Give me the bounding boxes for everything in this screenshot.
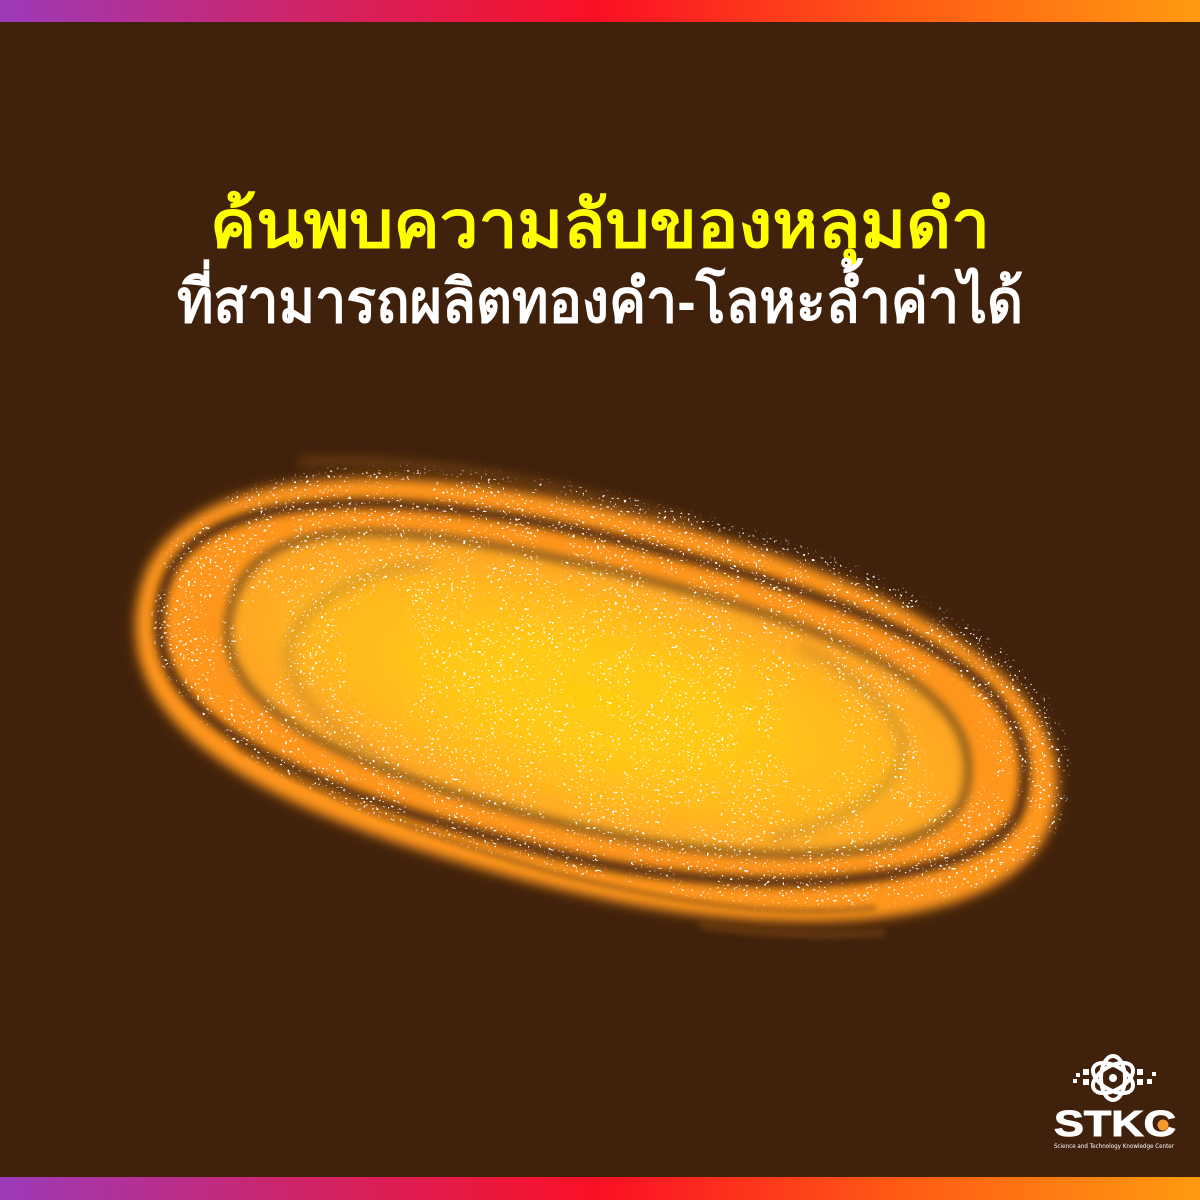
outer orange disc	[95, 404, 1099, 1000]
logo orange dot	[1158, 1120, 1168, 1130]
top wisp	[300, 461, 700, 525]
faint inner ring, left	[288, 565, 430, 772]
title	[177, 187, 1023, 335]
bottom gradient bar	[0, 1177, 1200, 1200]
STKC logo	[1054, 1056, 1176, 1150]
top gradient bar	[0, 0, 1200, 22]
outer dark ring	[124, 436, 1060, 960]
thin lower dark line	[225, 746, 876, 950]
logo emblem	[1073, 1056, 1156, 1100]
white star particles	[148, 462, 1073, 912]
title line 2: ที่สามารถผลิตทองคำ-โลหะล้ำค่าได้	[177, 257, 1023, 335]
galaxy illustration	[126, 453, 1072, 940]
logo tagline: Science and Technology Knowledge Center	[1054, 1143, 1174, 1150]
faint inner ring, right	[770, 647, 903, 838]
logo wordmark: STKC	[1054, 1103, 1176, 1144]
golden core with inner dark ring	[200, 484, 996, 916]
title line 1: ค้นพบความลับของหลุมดำ	[210, 187, 990, 266]
bottom wisp	[700, 925, 885, 934]
soft outer glow	[95, 404, 1099, 1000]
